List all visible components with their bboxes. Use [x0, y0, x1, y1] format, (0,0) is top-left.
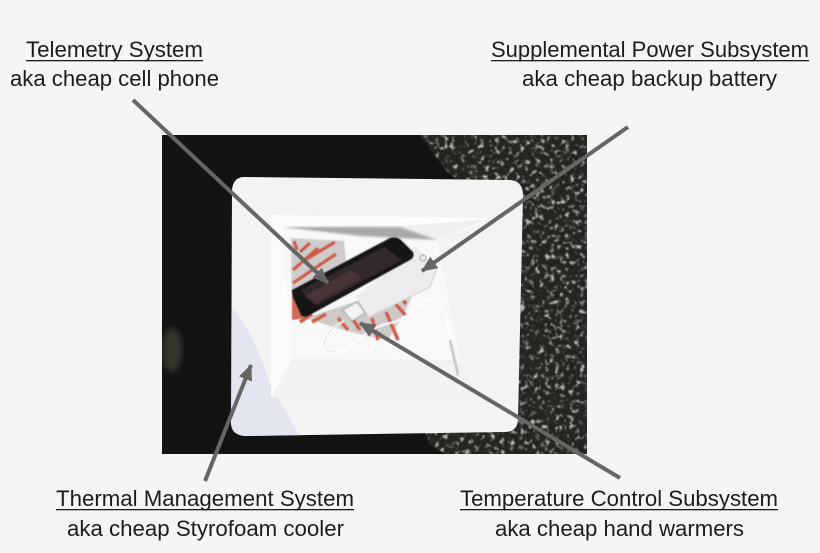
- backup battery: [356, 246, 437, 317]
- USB cable: [332, 314, 408, 336]
- cooler inner wall: left: [271, 215, 292, 397]
- arrow: temperature control subsystem: [360, 323, 620, 478]
- cooler inner wall: bottom: [271, 358, 483, 397]
- photo background: faint pavement patch: [162, 328, 182, 372]
- cooler inner floor: [282, 227, 460, 360]
- cooler inner wall: right: [437, 222, 485, 397]
- battery port: [420, 255, 426, 261]
- label: telemetry system: [10, 37, 219, 91]
- label: temperature control subsystem: [460, 486, 778, 541]
- photo background: gravel pavement: [420, 135, 587, 454]
- label: thermal management system: aka cheap Styrofoam cooler: [67, 516, 344, 541]
- label: telemetry system: Telemetry System: [26, 37, 203, 62]
- cell phone: [292, 237, 414, 317]
- arrow: thermal management system: [205, 365, 251, 481]
- label: supplemental power subsystem: Supplemental Power Subsystem: [491, 37, 809, 62]
- label: temperature control subsystem: aka cheap hand warmers: [495, 516, 744, 541]
- cooler inner wall: top: [282, 220, 485, 240]
- cooler opening: [272, 215, 485, 235]
- inner top edge shadow: [282, 227, 437, 240]
- foam cooler body: [231, 177, 523, 436]
- label: thermal management system: [56, 486, 354, 541]
- photo background: dark shadow: [162, 135, 457, 454]
- arrow: supplemental power subsystem: [422, 127, 628, 271]
- label: temperature control subsystem: Temperature Control Subsystem: [460, 486, 778, 511]
- arrow: telemetry system: [133, 100, 328, 283]
- phone screen reflection: [301, 247, 402, 306]
- USB connector: [343, 302, 365, 321]
- label: thermal management system: Thermal Management System: [56, 486, 354, 511]
- hand warmers: [291, 238, 412, 340]
- label: telemetry system: aka cheap cell phone: [10, 66, 219, 91]
- label: supplemental power subsystem: [491, 37, 809, 91]
- cooler shadow on rim: [231, 308, 300, 436]
- label: supplemental power subsystem: aka cheap backup battery: [522, 66, 777, 91]
- photo: styrofoam cooler on pavement: [162, 135, 587, 454]
